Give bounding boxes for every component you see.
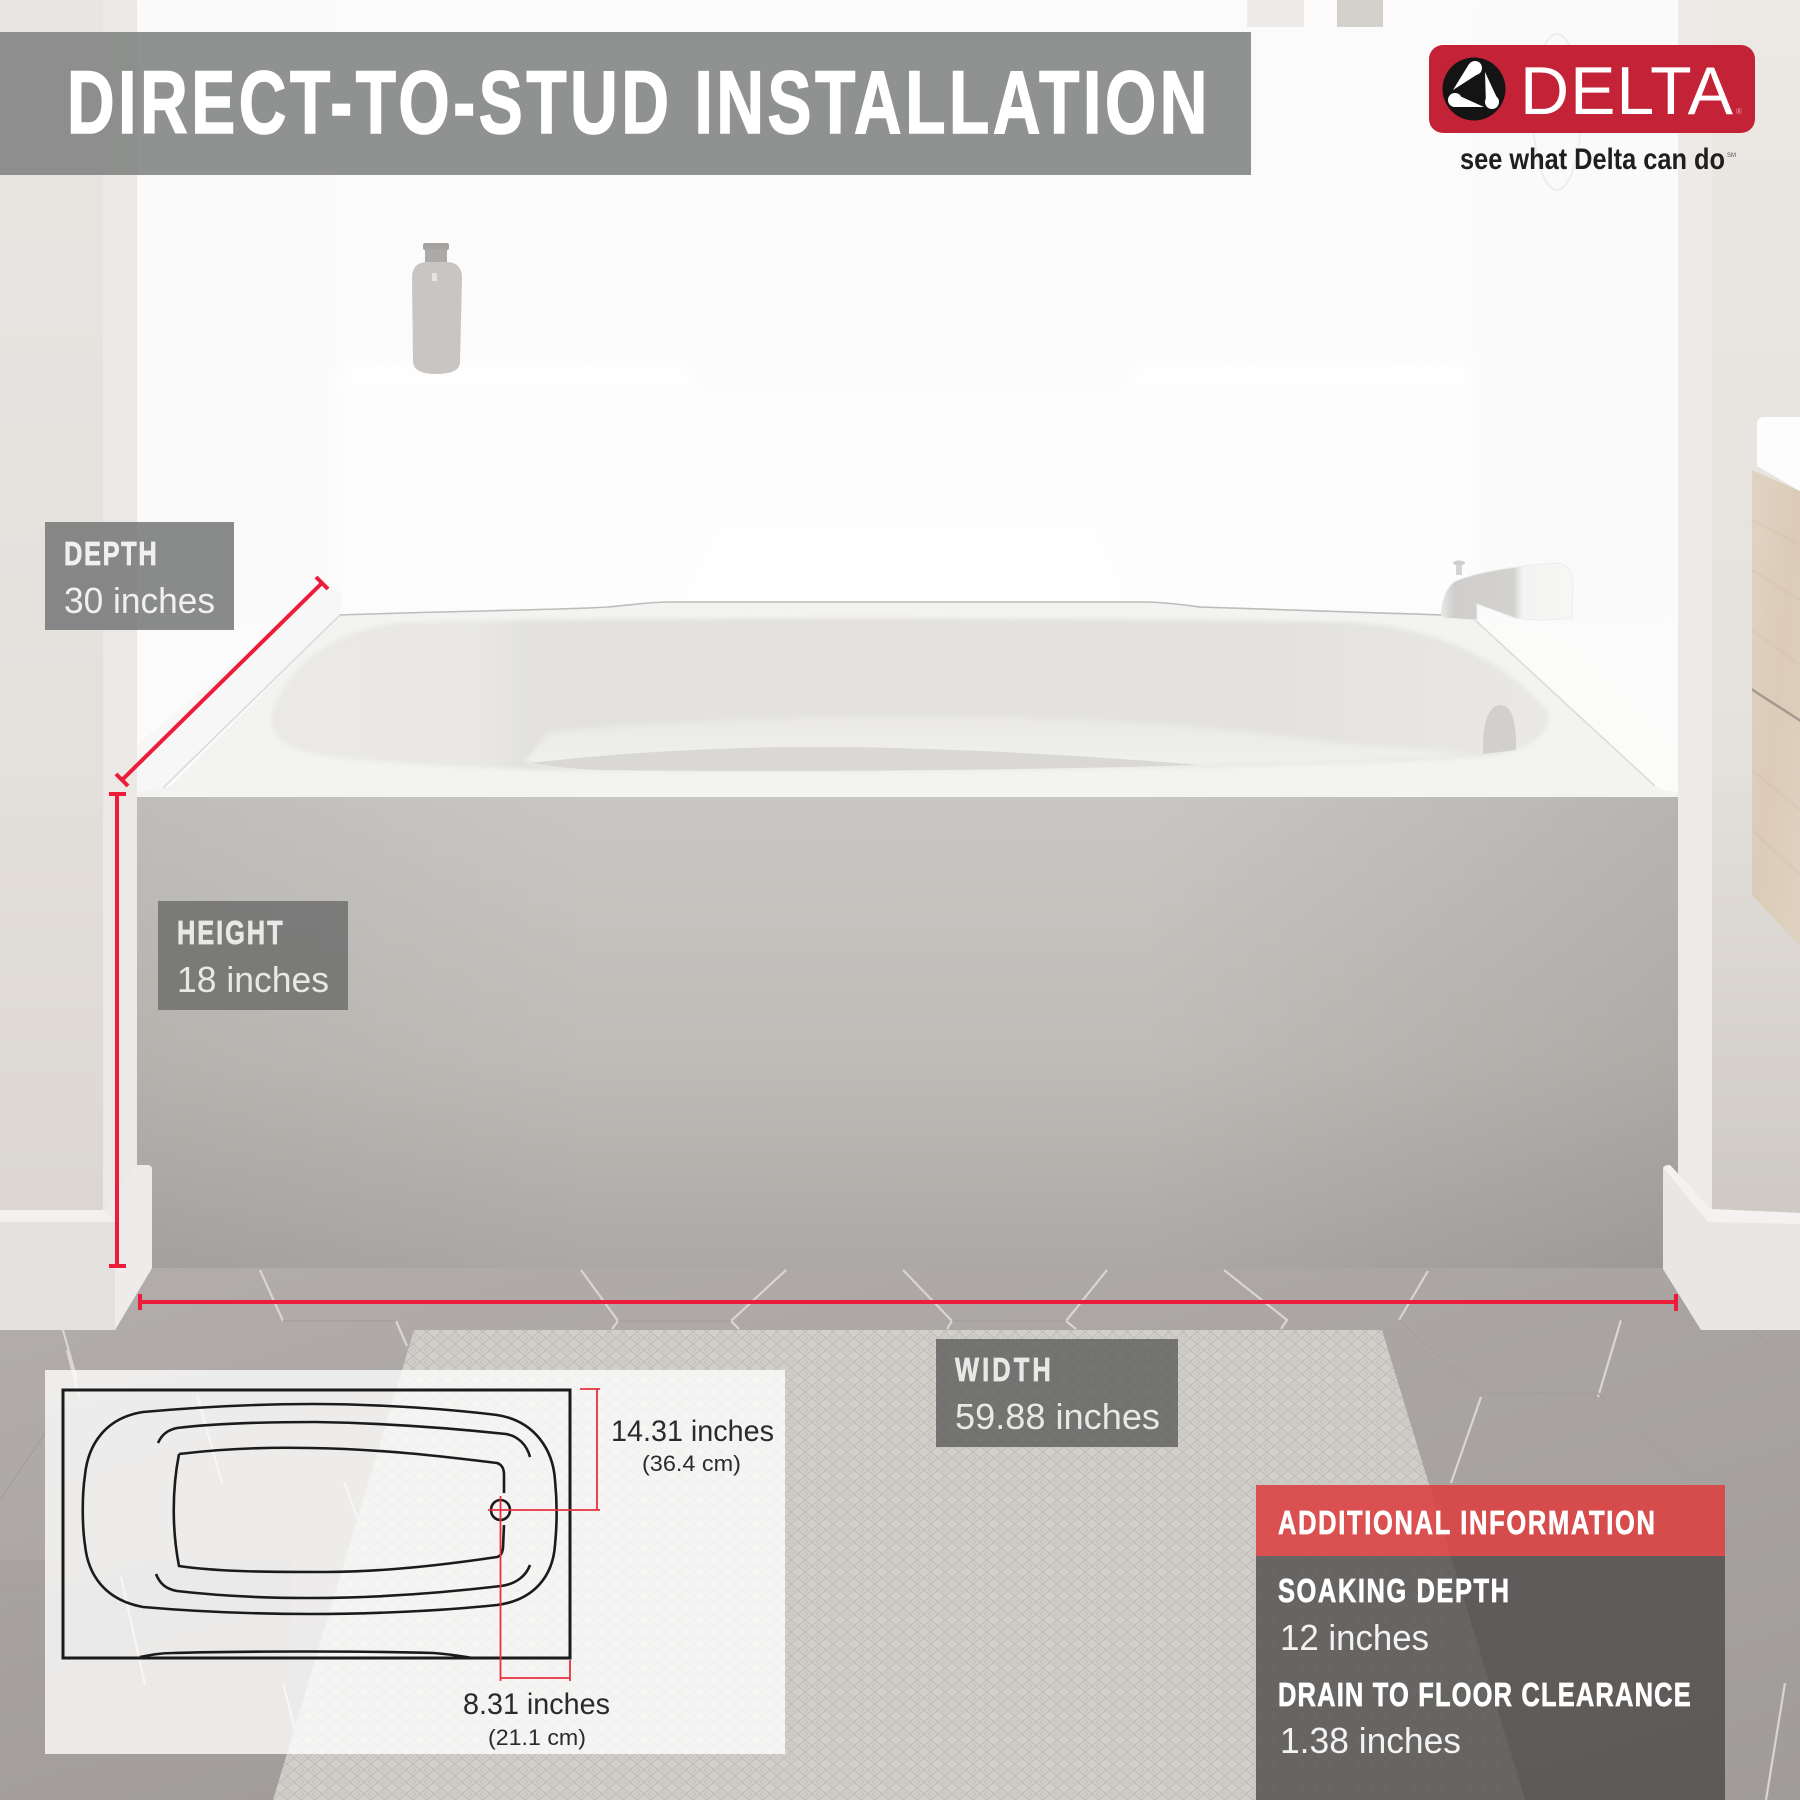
left wall (0, 0, 137, 1240)
dimension label: 8.31 inches: 8.31 inches (463, 1688, 610, 1721)
tub foot well (530, 747, 1200, 771)
Delta logo (1429, 45, 1755, 176)
tub right wall flange (1475, 620, 1678, 790)
Delta logo: ® (1736, 107, 1742, 116)
details body: DRAIN TO FLOOR CLEARANCE (1278, 1677, 1691, 1714)
callout: width: WIDTH (955, 1352, 1051, 1389)
right wall (1678, 0, 1800, 1240)
heading bar: ADDITIONAL INFORMATION (1278, 1505, 1655, 1542)
tub front apron (137, 797, 1678, 1268)
callout: depth: 30 inches (64, 580, 215, 621)
vanity sink and wood cabinet (1752, 417, 1800, 946)
tub overflow drain (1483, 705, 1516, 754)
callout: depth: DEPTH (64, 536, 157, 573)
shower valve trim (1533, 34, 1581, 190)
Delta logo: DELTA (1520, 53, 1734, 129)
red drain dimension lines (488, 1389, 600, 1681)
panel: additional information (1256, 1485, 1725, 1800)
Delta logo: see what Delta can do (1460, 143, 1725, 176)
heading bar (1256, 1485, 1725, 1556)
title (0, 32, 1251, 175)
callout: width (936, 1339, 1178, 1447)
dimension label: 8.31 inches (463, 1688, 610, 1750)
tub foot ridge (525, 716, 1481, 770)
details body (1256, 1556, 1725, 1800)
details body: 12 inches (1280, 1617, 1429, 1658)
bathtub (137, 560, 1678, 1268)
callout: width: 59.88 inches (955, 1396, 1160, 1437)
tub side edges (163, 615, 1655, 788)
tub plan outline (63, 1390, 570, 1658)
callout: height: HEIGHT (177, 915, 283, 952)
dimension arrow: depth (116, 577, 328, 786)
floor tile joints (0, 1270, 1800, 1800)
tub left wall flange (137, 583, 342, 792)
patterned rug (273, 1330, 1525, 1800)
floor (0, 1268, 1800, 1800)
dimension label: 8.31 inches: (21.1 cm) (488, 1725, 586, 1750)
panel: tub overhead diagram (45, 1370, 785, 1754)
icon: Delta triangle mark (1442, 58, 1506, 120)
icon: shampoo bottle (412, 243, 462, 374)
details body: 1.38 inches (1280, 1720, 1461, 1761)
right baseboard (1663, 1165, 1800, 1330)
dimension label: 14.31 inches: 14.31 inches (611, 1415, 774, 1448)
dimension label: 14.31 inches (611, 1415, 774, 1476)
callout: height (158, 901, 348, 1010)
tub back edge (340, 602, 1443, 615)
dimension label: 14.31 inches: (36.4 cm) (642, 1451, 741, 1476)
Delta logo: SM (1727, 153, 1736, 159)
left baseboard (0, 1165, 152, 1330)
callout: height: 18 inches (177, 959, 329, 1000)
callout: depth (45, 522, 234, 630)
details body: SOAKING DEPTH (1278, 1573, 1509, 1610)
title: DIRECT-TO-STUD INSTALLATION (67, 52, 1207, 152)
shower wall (0, 0, 1800, 800)
shelf bottles top (1247, 0, 1383, 27)
dimension arrow: width (140, 1294, 1676, 1311)
tub basin (271, 618, 1549, 770)
dimension arrow: height (109, 794, 126, 1266)
tub rim (137, 602, 1678, 800)
shower wall recess panels (137, 0, 1678, 620)
tub faucet spout (1441, 560, 1573, 620)
